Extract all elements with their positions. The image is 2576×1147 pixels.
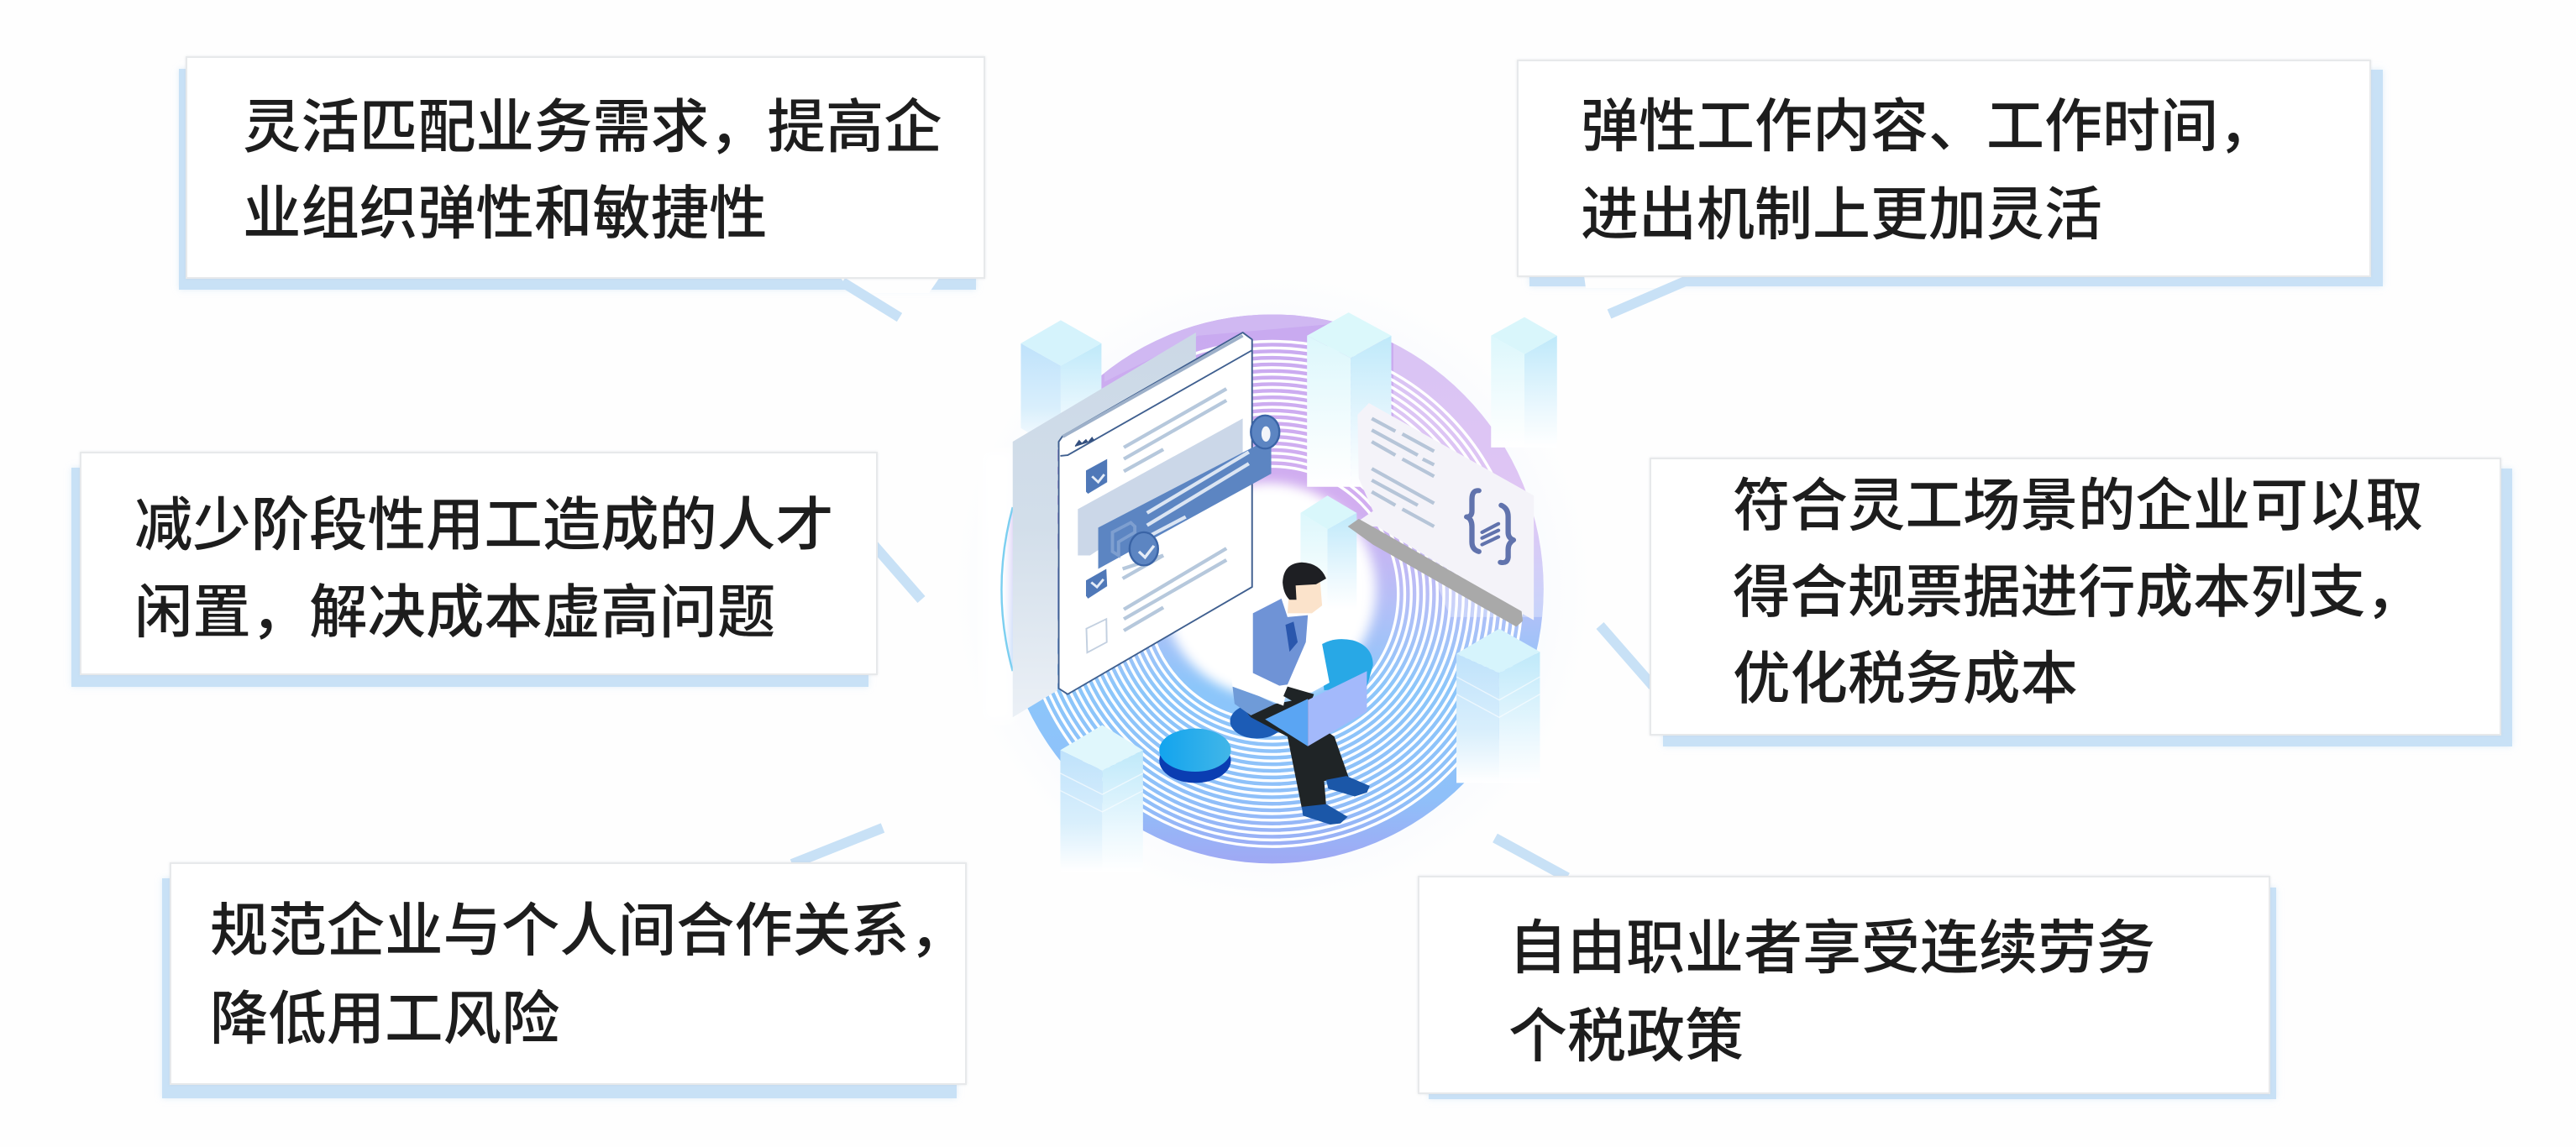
panel body — [80, 452, 878, 675]
tail — [878, 542, 926, 603]
text: 降低用工风险 — [210, 986, 559, 1051]
panel shadow — [179, 69, 976, 290]
text — [210, 898, 968, 1051]
face — [1288, 580, 1322, 613]
callout: bottom right — [1418, 833, 2278, 1102]
dark blue card — [1099, 437, 1272, 569]
blue disc stool — [1159, 729, 1231, 783]
text — [1581, 94, 2276, 247]
panel body — [1650, 458, 2501, 736]
badge top — [1251, 416, 1279, 448]
window dots — [1075, 437, 1094, 447]
tower: top left — [1020, 320, 1101, 451]
speech bubble — [1348, 403, 1534, 626]
tie — [1285, 621, 1298, 652]
text: 减少阶段性用工造成的人才 — [134, 492, 834, 558]
hand and wrist — [1283, 687, 1314, 710]
code brace icon — [1466, 490, 1514, 563]
text — [1733, 474, 2423, 711]
panel body — [186, 56, 985, 279]
panel body — [1418, 876, 2270, 1094]
trousers — [1236, 698, 1349, 808]
tower: center small — [1300, 495, 1356, 610]
panel shadow — [71, 468, 868, 687]
tail — [842, 279, 939, 322]
text: 规范企业与个人间合作关系， — [210, 898, 968, 963]
text: 自由职业者享受连续劳务 — [1508, 915, 2155, 981]
text — [134, 492, 834, 645]
tail — [1584, 277, 1687, 319]
left white fade — [982, 451, 1013, 721]
document window — [1059, 333, 1279, 694]
checkbox icons — [1086, 459, 1107, 494]
panel shadow — [162, 878, 957, 1098]
vest — [1253, 599, 1308, 686]
gray panel behind window — [1013, 333, 1196, 717]
badge bottom — [1130, 532, 1158, 565]
text: 个税政策 — [1508, 1003, 1744, 1069]
thin cyan arc — [1001, 507, 1013, 671]
tail — [1596, 622, 1650, 689]
shoes — [1326, 776, 1370, 796]
back stool — [1319, 639, 1373, 690]
tower: top right — [1491, 317, 1557, 448]
seat stool — [1230, 704, 1284, 739]
callout: bottom left — [160, 823, 968, 1100]
text: 灵活匹配业务需求，提高企 — [243, 94, 942, 160]
central illustration — [1000, 312, 1557, 863]
text: 弹性工作内容、工作时间， — [1581, 94, 2276, 159]
text: 得合规票据进行成本列支， — [1733, 560, 2423, 625]
panel shadow — [1429, 888, 2276, 1099]
callout: top left — [176, 55, 986, 322]
laptop screen — [1308, 671, 1367, 746]
waist — [1232, 687, 1275, 715]
tail — [790, 823, 884, 862]
callout: top right — [1517, 59, 2385, 319]
panel shadow — [1663, 469, 2512, 746]
text — [243, 94, 942, 246]
panel body — [1517, 60, 2371, 277]
title bar — [1060, 350, 1252, 456]
inner white circle — [1162, 483, 1376, 697]
tower: right lower — [1456, 629, 1540, 783]
text: 进出机制上更加灵活 — [1581, 182, 2102, 247]
tower: top middle — [1307, 312, 1392, 487]
tower: bottom left — [1060, 725, 1143, 872]
light band — [1078, 418, 1243, 555]
panel shadow — [1529, 70, 2383, 286]
callout: middle left — [69, 452, 926, 689]
bubble text lines — [1372, 418, 1434, 526]
text: 业组织弹性和敏捷性 — [243, 181, 768, 246]
panel body — [170, 862, 967, 1085]
callout: middle right — [1596, 457, 2515, 749]
list lines — [1123, 389, 1226, 631]
striped ring disc — [990, 309, 1561, 872]
tail — [1493, 833, 1570, 876]
text: 优化税务成本 — [1733, 647, 2078, 711]
text: 符合灵工场景的企业可以取 — [1733, 474, 2423, 538]
background glow — [951, 273, 1593, 905]
shirt — [1230, 602, 1330, 706]
gray bar — [1348, 519, 1523, 626]
text — [1508, 915, 2155, 1069]
person on stool with laptop — [1230, 563, 1373, 825]
hair — [1283, 563, 1326, 600]
text: 闲置，解决成本虚高问题 — [134, 579, 775, 645]
bubble body — [1351, 403, 1534, 621]
laptop base — [1265, 699, 1308, 746]
